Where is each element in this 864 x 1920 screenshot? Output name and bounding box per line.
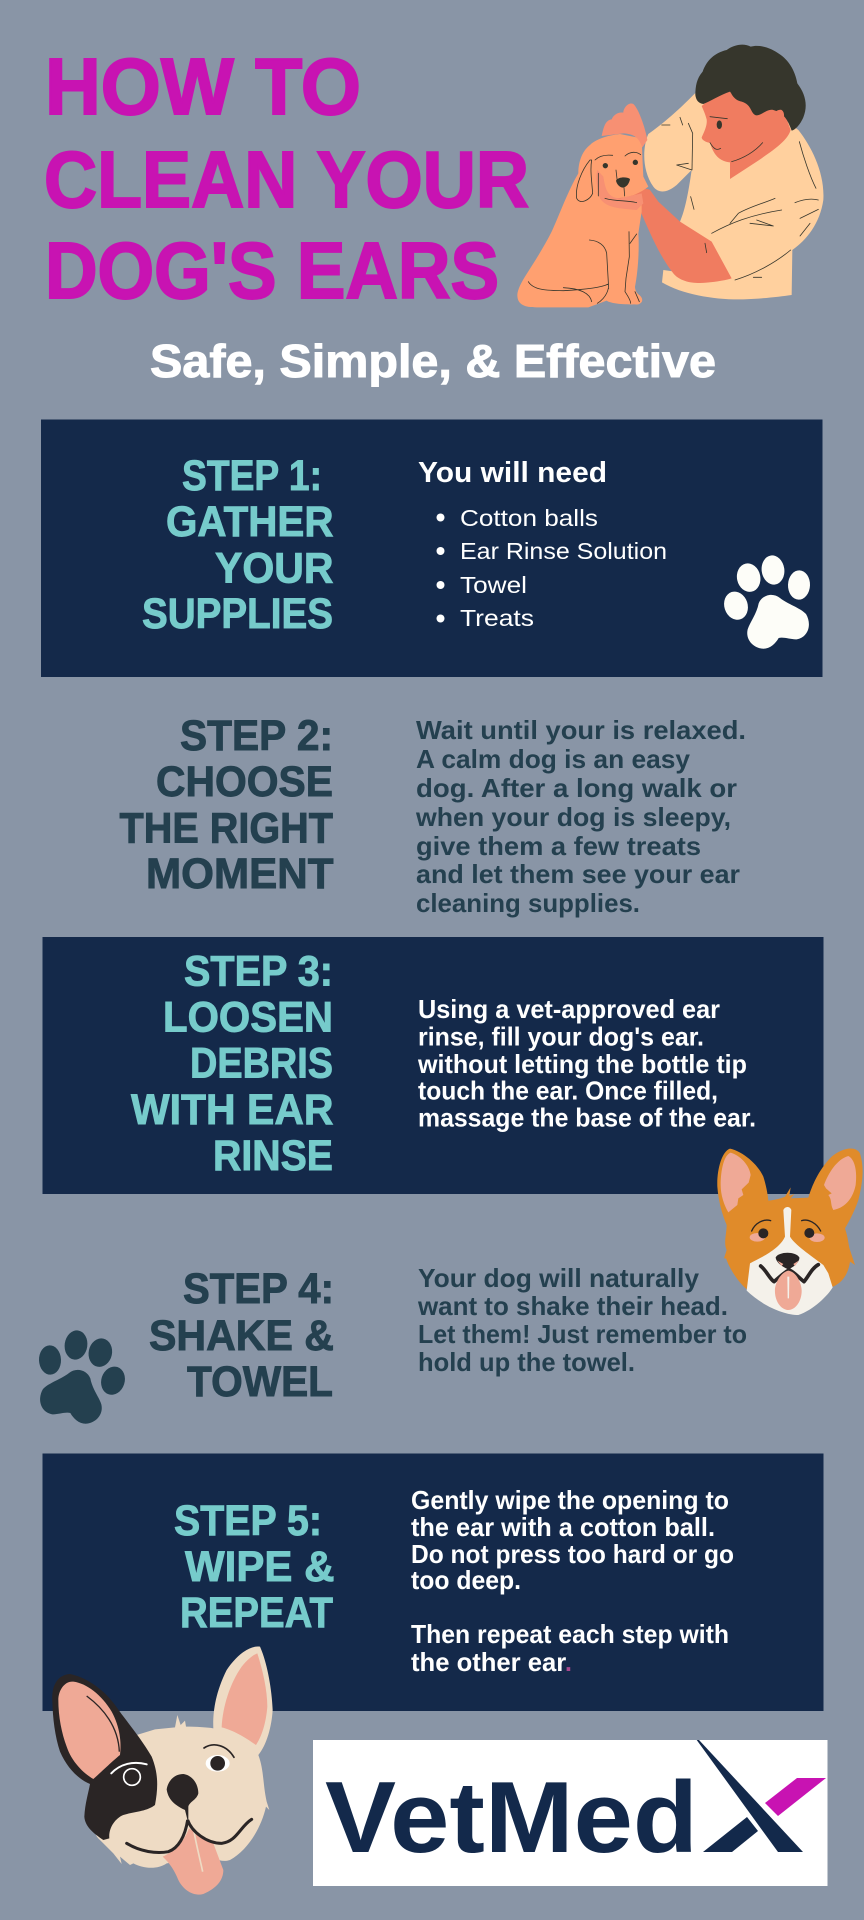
body text: step 5: the other ear.	[411, 1647, 572, 1677]
title: CLEAN YOUR	[44, 135, 529, 224]
body text: step 5: Then repeat each step with	[411, 1619, 729, 1649]
heading: step 1: GATHER	[166, 498, 334, 546]
icon: white paw	[720, 554, 811, 649]
title: HOW TO	[45, 42, 361, 131]
supplies list: Treats	[460, 605, 534, 631]
body text: step 5	[411, 1485, 734, 1677]
supplies list: Ear Rinse Solution	[460, 538, 667, 564]
body text: step 4: hold up the towel.	[418, 1347, 635, 1377]
body text: step 5: Gently wipe the opening to	[411, 1485, 729, 1515]
subtitle: Safe, Simple, & Effective	[150, 335, 716, 387]
logo: VetMedX	[313, 1740, 828, 1886]
heading: step 3: WITH EAR	[131, 1086, 334, 1134]
heading: step 1: YOUR	[215, 544, 334, 592]
body text: step 4	[417, 1263, 747, 1377]
heading: step 4: SHAKE &	[149, 1312, 334, 1360]
body text: step 2: A calm dog is an easy	[416, 744, 691, 774]
heading: step 3: LOOSEN	[163, 994, 333, 1042]
heading: step 3: STEP 3:	[184, 948, 333, 996]
illustration: french bulldog head	[52, 1646, 273, 1895]
panel: step 5 wipe and repeat	[42, 1454, 824, 1711]
body text: step 3: Using a vet-approved ear	[418, 994, 720, 1024]
heading: step 2: STEP 2:	[180, 712, 333, 760]
heading: step 1	[142, 452, 334, 638]
illustration: corgi head	[717, 1149, 863, 1315]
heading: step 2: CHOOSE	[156, 758, 333, 806]
heading: step 3: DEBRIS	[190, 1040, 333, 1088]
supplies list: Towel	[460, 572, 527, 598]
logo: VetMedX: VetMed	[325, 1762, 698, 1874]
panel: step 1 gather supplies	[41, 420, 822, 677]
body text: step 5: the ear with a cotton ball.	[411, 1512, 715, 1542]
heading: step 3: RINSE	[213, 1132, 333, 1180]
body text: step 4: want to shake their head.	[417, 1291, 728, 1321]
body text: step 5: Do not press too hard or go	[411, 1539, 734, 1569]
supplies list	[418, 457, 667, 631]
heading: step 4	[149, 1265, 334, 1406]
body text: step 3: without letting the bottle tip	[417, 1049, 747, 1079]
heading: step 5: STEP 5:	[174, 1497, 322, 1545]
panel: step 3 loosen debris	[42, 937, 824, 1194]
panel: step 4 shake and towel	[38, 1263, 747, 1424]
body text: step 3: touch the ear. Once filled,	[418, 1076, 718, 1106]
body text: step 2: Wait until your is relaxed.	[416, 715, 746, 745]
heading: step 1: STEP 1:	[182, 452, 322, 500]
panel: step 2 choose the moment	[120, 712, 746, 918]
body text: step 2	[415, 715, 746, 918]
heading: step 4: TOWEL	[187, 1358, 333, 1406]
title: DOG'S EARS	[45, 226, 499, 315]
body text: step 2: give them a few treats	[416, 831, 701, 861]
heading: step 1: SUPPLIES	[142, 590, 333, 638]
heading: step 4: STEP 4:	[183, 1265, 334, 1313]
body text: step 4: Your dog will naturally	[418, 1263, 700, 1293]
supplies list: Cotton balls	[460, 505, 598, 531]
illustration: person examining dog's ear	[517, 45, 823, 307]
icon: dark paw	[38, 1329, 129, 1424]
heading: step 3	[131, 948, 334, 1180]
heading: step 2: MOMENT	[146, 850, 334, 898]
body text: step 3: rinse, fill your dog's ear.	[418, 1022, 704, 1052]
heading: step 5: WIPE &	[185, 1543, 334, 1591]
heading: step 5	[174, 1497, 334, 1637]
supplies list: You will need	[418, 457, 607, 489]
body text: step 3: massage the base of the ear.	[418, 1102, 756, 1132]
body text: step 2: cleaning supplies.	[416, 888, 640, 918]
body text: step 2: dog. After a long walk or	[416, 773, 737, 803]
body text: step 3	[417, 994, 756, 1132]
body text: step 2: and let them see your ear	[416, 859, 740, 889]
heading: step 2	[120, 712, 334, 898]
body text: step 4: Let them! Just remember to	[418, 1319, 747, 1349]
heading: step 5: REPEAT	[180, 1589, 333, 1637]
heading: step 2: THE RIGHT	[120, 804, 333, 852]
body text: step 2: when your dog is sleepy,	[415, 802, 731, 832]
title	[44, 42, 529, 315]
body text: step 5: too deep.	[411, 1565, 521, 1595]
